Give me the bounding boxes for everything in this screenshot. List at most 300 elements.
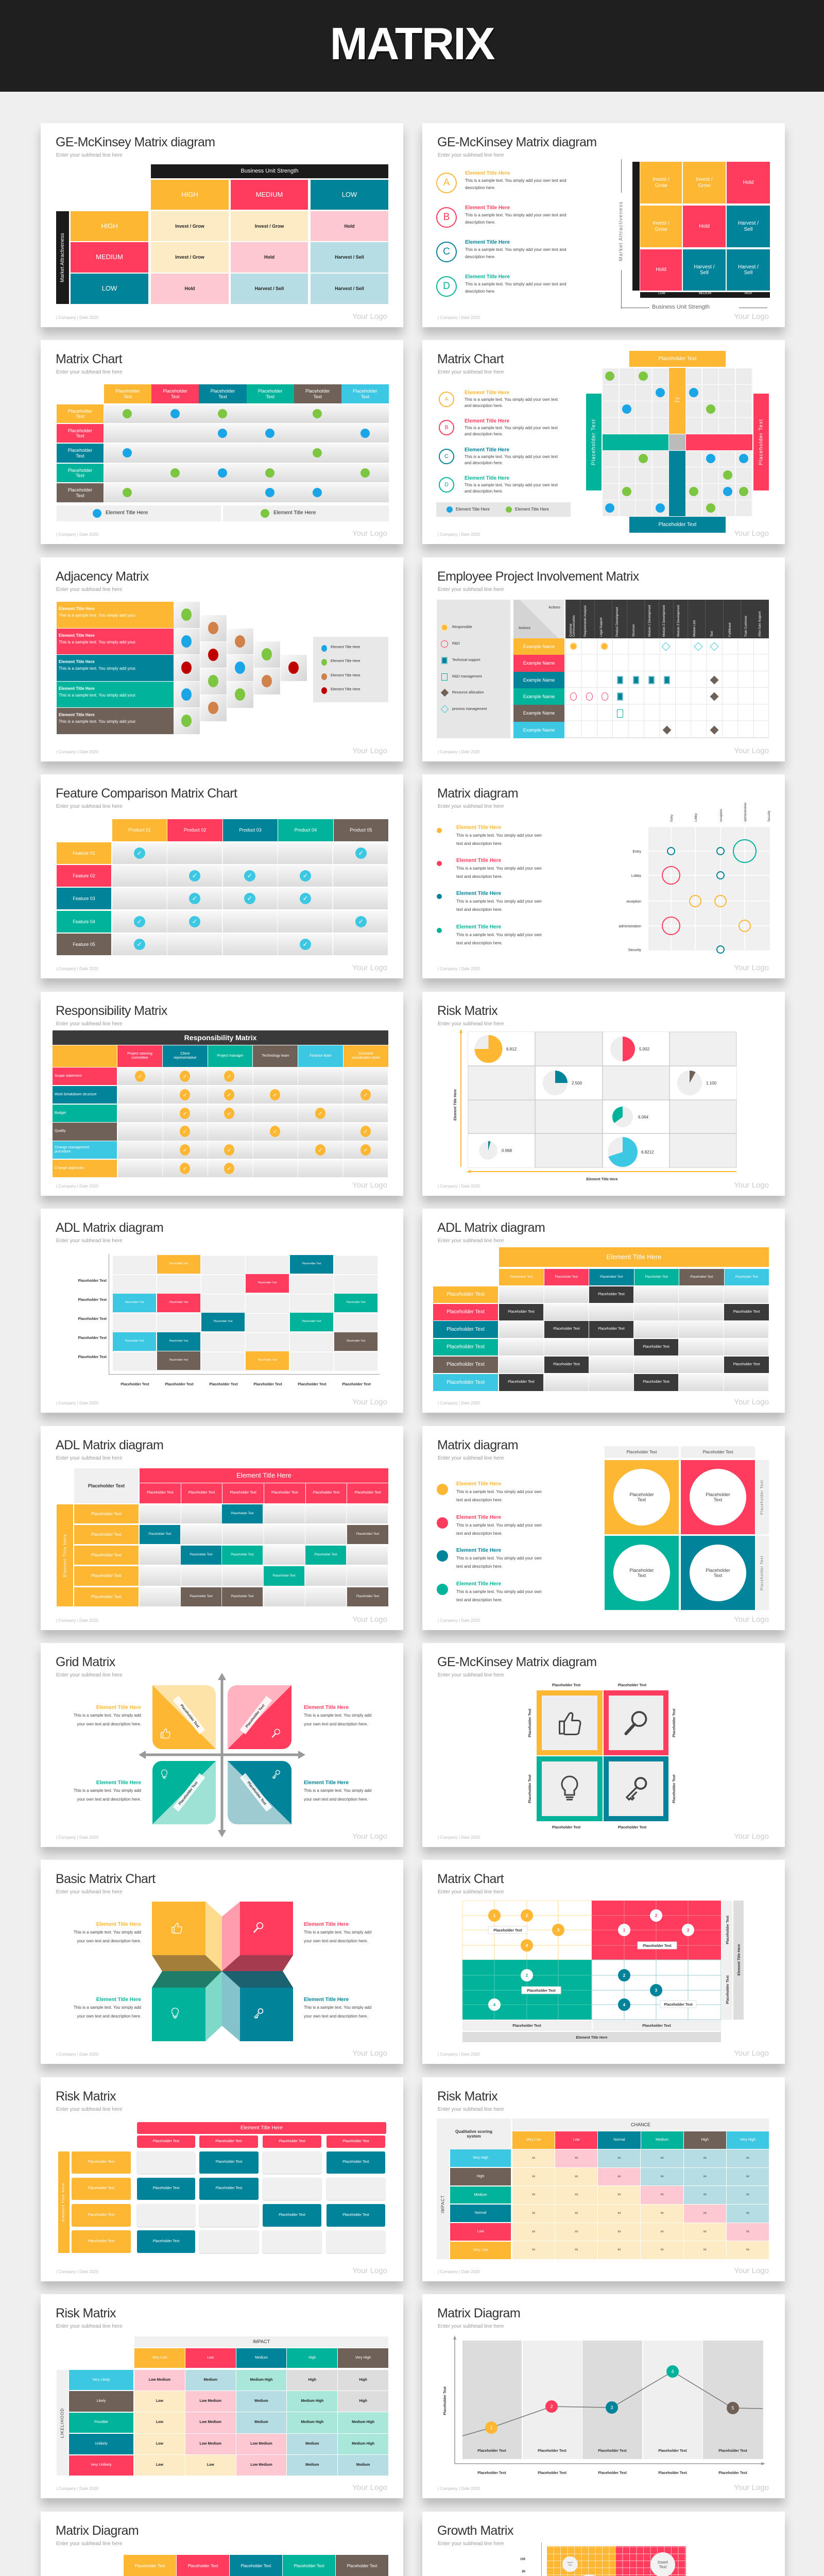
headers: Placeholder Text [294, 2564, 324, 2568]
slide 3: Matrix Chart dot table [41, 340, 403, 544]
slide 13: ADL Matrix diagram red header: Enter your subhead line here [56, 1455, 122, 1461]
cell grid: Placeholder Text [153, 2240, 179, 2243]
orange checks: ✓ [272, 1128, 278, 1134]
column headers: Placeholder [163, 388, 187, 394]
table: xx [661, 2175, 664, 2178]
legend panel [437, 600, 510, 738]
slide 1: GE-McKinsey matrix table: Hold [264, 255, 274, 260]
row labels and grid: Example Name [523, 727, 555, 733]
list: Element Title Here [456, 1581, 501, 1587]
table: xx [532, 2230, 535, 2233]
slide 10: Risk Matrix pies: Enter your subhead line here [438, 1021, 504, 1027]
table: Low [156, 2420, 163, 2424]
colored element bars: Element Title Here [59, 606, 95, 611]
list A-D: description here. [465, 255, 495, 259]
element list [437, 825, 542, 945]
pie grid chart: Element Title Here [454, 1089, 457, 1121]
table: xx [746, 2175, 749, 2178]
quadrant graphic with arrows: Placeholder Text [178, 1781, 199, 1806]
quadrant chart: Placeholder Text [527, 1989, 556, 1993]
row headers and rows: Text [76, 414, 84, 419]
product headers: Product 01 [128, 827, 151, 833]
slide 17: Basic Matrix Chart folded: This is a sample text. You simply add [74, 2005, 141, 2010]
table: xx [532, 2248, 535, 2251]
table: xx [532, 2212, 535, 2215]
check marks: ✓ [137, 849, 142, 857]
slide 17: Basic Matrix Chart folded: your own text and description here. [77, 2014, 141, 2019]
slide 17: Basic Matrix Chart folded: Enter your subhead line here [56, 1889, 122, 1895]
slide 19: Risk Matrix rounded cells: Placeholder Text [342, 2140, 369, 2143]
slide 13: ADL Matrix diagram red header: Placeholder Text [271, 1491, 298, 1495]
check marks: ✓ [192, 894, 197, 903]
slide 4: Matrix Chart cross layout: here [675, 400, 680, 403]
slide 14: Matrix diagram quadrant circles: Enter your subhead line here [438, 1455, 504, 1461]
quadrant matrix: Placeholder Text [760, 1480, 764, 1515]
table: LIKELIHOOD [60, 2408, 64, 2438]
slide 4: Matrix Chart cross layout: Placeholder Text [659, 356, 696, 362]
feature rows: Feature 02 [73, 873, 95, 878]
slide 15: Grid Matrix: This is a sample text. You simply add [304, 1788, 371, 1793]
bubble chart: Entry [671, 815, 674, 822]
quadrant chart: Element Title Here [576, 2036, 608, 2040]
task rows: Budget [55, 1111, 66, 1115]
cell grid: Placeholder Text [216, 2187, 242, 2190]
slide 7: Feature Comparison Matrix Chart: Feature Comparison Matrix Chart [56, 786, 237, 801]
colored element bars: This is a sample text. You simply add your. [59, 640, 136, 645]
line chart: 5 [731, 2405, 734, 2411]
legend: Element Title Here [106, 510, 148, 516]
A-D list [439, 390, 558, 494]
cell grid: Placeholder Text [88, 2240, 114, 2243]
slide 12: ADL Matrix diagram dark cells: Placeholder Text [510, 1276, 533, 1279]
slide 18: Matrix Chart numbered quadrants: Matrix Chart [437, 1872, 504, 1886]
cross grid [603, 368, 752, 516]
quadrant chart: 2 [623, 1973, 626, 1978]
slide 15: Grid Matrix: This is a sample text. You simply add [304, 1713, 371, 1718]
row headers and rows [57, 404, 389, 502]
slide 10: Risk Matrix pies: | Company | Date 2020 [438, 1184, 480, 1189]
rows: Placeholder Text [190, 1553, 213, 1556]
colored element bars: This is a sample text. You simply add your. [59, 613, 136, 618]
bubble chart: reception [720, 809, 723, 822]
red header [140, 1468, 388, 1483]
slide 3: Matrix Chart dot table: Enter your subhead line here [56, 369, 122, 375]
slide 6: Employee Project Involvement Matrix: Employee Project Involvement Matrix [437, 569, 639, 584]
slide 14: Matrix diagram quadrant circles: Matrix diagram [437, 1438, 518, 1452]
table: Very Low [152, 2356, 167, 2360]
involvement markers [570, 642, 719, 735]
line chart: Placeholder Text [598, 2449, 627, 2453]
check marks: ✓ [192, 918, 197, 925]
rows: Placeholder Text [598, 1327, 625, 1331]
rows: Placeholder Text [733, 1310, 760, 1314]
column headers: representative [174, 1056, 196, 1060]
icon quadrants: Placeholder Text [552, 1826, 580, 1829]
table title bar [53, 1030, 388, 1045]
diagonal header cell [513, 600, 564, 638]
rows: Placeholder Text [148, 1533, 171, 1536]
table: Low [573, 2138, 580, 2142]
slide 4: Matrix Chart cross layout: Enter your subhead line here [438, 369, 504, 375]
table: Very Likely [93, 2378, 110, 2382]
headers: Placeholder Text [347, 2564, 377, 2568]
table: Medium High [301, 2420, 323, 2424]
check marks: ✓ [137, 941, 142, 948]
slide 8: Matrix diagram bubble grid: | Company | Date 2020 [438, 967, 480, 971]
quadrant matrix: Placeholder [629, 1492, 654, 1497]
slide 12: ADL Matrix diagram dark cells: Placeholder Text [645, 1276, 668, 1279]
row headers and rows: Text [76, 493, 84, 498]
pie grid chart: 2.500 [572, 1081, 582, 1086]
list: This is a sample text. You simply add your own [456, 1489, 542, 1494]
row headers and rows: Placeholder [68, 428, 92, 433]
header: Element Title Here [241, 2125, 283, 2131]
slide 11: ADL Matrix diagram scatter grid: ADL Matrix diagram [56, 1221, 163, 1235]
slide 16: GE-McKinsey icon quadrants [422, 1643, 785, 1847]
legend box: Element Title Here [331, 646, 360, 649]
slide 2: GE-McKinsey with A-D list: | Company | Date 2020 [438, 315, 480, 320]
check marks [134, 848, 367, 950]
table: Medium [656, 2138, 668, 2142]
slide 1: GE-McKinsey matrix table [41, 123, 403, 327]
grid [113, 1255, 379, 1371]
table: Low Medium [200, 2442, 221, 2446]
growth grid chart: Text [568, 2564, 572, 2566]
list A-D: description here. [465, 185, 495, 190]
table: IMPACT [440, 2195, 445, 2213]
slide 9: Responsibility Matrix: | Company | Date 2020 [56, 1184, 98, 1189]
slide 17: Basic Matrix Chart folded [41, 1860, 403, 2064]
orange checks: ✓ [363, 1147, 368, 1153]
rows [74, 1504, 388, 1606]
colored element bars: Element Title Here [59, 633, 95, 638]
slide 6: Employee Project Involvement Matrix: Your Logo [734, 747, 769, 755]
rows: Placeholder Text [447, 1292, 485, 1297]
slide 2: GE-McKinsey with A-D list: Harvest / [738, 221, 759, 226]
slide 23: Matrix Diagram status icons: Matrix Diagram [56, 2523, 139, 2538]
table: xx [617, 2248, 621, 2251]
quadrant matrix [605, 1446, 769, 1610]
slide 19: Risk Matrix rounded cells [41, 2077, 403, 2281]
slide 1: GE-McKinsey matrix table: Harvest / Sell [335, 255, 364, 260]
column headers: Project steering [127, 1052, 152, 1056]
line chart: Placeholder Text [443, 2386, 447, 2415]
slide 2: GE-McKinsey with A-D list: MEDIUM [699, 292, 711, 295]
quadrant matrix: Placeholder [706, 1568, 730, 1573]
legend: Element Title Here [273, 510, 316, 516]
dots [123, 409, 370, 497]
table: xx [746, 2212, 749, 2215]
list A-D: description here. [465, 289, 495, 294]
element list: text and description here. [456, 874, 503, 879]
table: xx [575, 2157, 578, 2160]
dark column headers: After-Sale Support [759, 612, 762, 637]
quadrant matrix: Placeholder [706, 1492, 730, 1497]
text blocks [74, 1705, 141, 1726]
quadrant chart: 3 [655, 1988, 658, 1993]
slide 5: Adjacency Matrix: Adjacency Matrix [56, 569, 149, 584]
slide 17: Basic Matrix Chart folded: your own text and description here. [304, 2014, 368, 2019]
slide 2: GE-McKinsey with A-D list [422, 123, 785, 327]
slide 11: ADL Matrix diagram scatter grid: Placeholder Text [342, 1383, 371, 1386]
orange checks: ✓ [182, 1147, 187, 1153]
table: xx [661, 2230, 664, 2233]
A-D list: and description here. [465, 461, 503, 465]
slide 17: Basic Matrix Chart folded: This is a sample text. You simply add [304, 2005, 371, 2010]
legend panel: Technical support [452, 658, 480, 662]
line chart: Placeholder Text [718, 2471, 747, 2475]
slide 13: ADL Matrix diagram red header: | Company | Date 2020 [56, 1618, 98, 1623]
growth grid chart: Text [659, 2565, 666, 2569]
colored cells: Placeholder Text [302, 1262, 321, 1265]
slide 10: Risk Matrix pies: Your Logo [734, 1181, 769, 1190]
slide 4: Matrix Chart cross layout: Placeholder Text [591, 419, 596, 465]
list: This is a sample text. You simply add your own [456, 1556, 542, 1561]
slide 11: ADL Matrix diagram scatter grid: Placeholder Text [78, 1336, 107, 1340]
colored cells: Placeholder Text [169, 1262, 188, 1265]
dark column headers: Module 2 Development [663, 605, 666, 637]
vertical yellow bar: Element Title Here [62, 1534, 67, 1577]
slide 6: Employee Project Involvement Matrix: Enter your subhead line here [438, 587, 504, 592]
element list: text and description here. [456, 907, 503, 912]
row labels and grid: Example Name [523, 694, 555, 699]
table title bar: Responsibility Matrix [184, 1033, 256, 1042]
table [437, 2119, 769, 2259]
growth grid chart: 100 [520, 2558, 525, 2561]
list: text and description here. [456, 1531, 503, 1536]
growth grid chart: Insert [658, 2560, 668, 2565]
colored cells: Placeholder Text [125, 1301, 144, 1304]
table: Low Medium [149, 2378, 170, 2382]
slide 3: Matrix Chart dot table: Matrix Chart [56, 352, 122, 366]
table: xx [661, 2212, 664, 2215]
check marks: ✓ [358, 918, 364, 925]
table: Medium High [301, 2399, 323, 2403]
column headers: Text [218, 394, 227, 399]
slide 20: Risk Matrix chance vs impact: Enter your subhead line here [438, 2107, 504, 2112]
quadrant chart [462, 1900, 744, 2042]
list: Element Title Here [456, 1515, 501, 1520]
slide 11: ADL Matrix diagram scatter grid: Placeholder Text [165, 1383, 194, 1386]
slide 5: Adjacency Matrix [41, 557, 403, 761]
rows: Placeholder Text [553, 1327, 580, 1331]
A-D list: A [444, 396, 449, 402]
column headers: Text [266, 394, 274, 399]
slide 19: Risk Matrix rounded cells: Your Logo [352, 2266, 387, 2275]
line chart: Placeholder Text [658, 2471, 687, 2475]
slide 2: GE-McKinsey with A-D list: Harvest / [738, 264, 759, 270]
slide 15: Grid Matrix: your own text and description here. [304, 1722, 368, 1726]
quadrant chart: 2 [526, 1973, 528, 1978]
slide 10: Risk Matrix pies [422, 992, 785, 1196]
colored element bars [57, 602, 174, 734]
table: xx [575, 2212, 578, 2215]
matrix grid [632, 162, 640, 291]
slide 12: ADL Matrix diagram dark cells [422, 1209, 785, 1413]
quadrant chart: 3 [557, 1928, 560, 1933]
list A-D: B [443, 212, 450, 223]
table: Very Unlikely [91, 2463, 112, 2467]
element list: text and description here. [456, 841, 503, 846]
column headers: Text [171, 394, 179, 399]
colored cells: Placeholder Text [169, 1340, 188, 1343]
cell grid: Placeholder Text [216, 2160, 242, 2164]
row labels and grid: Example Name [523, 710, 555, 716]
slide 16: GE-McKinsey icon quadrants: | Company | Date 2020 [438, 1835, 480, 1840]
table: xx [532, 2157, 535, 2160]
table: xx [661, 2193, 664, 2196]
slide 12: ADL Matrix diagram dark cells: ADL Matrix diagram [437, 1221, 545, 1235]
product headers: Product 02 [184, 827, 206, 833]
list A-D: Element Title Here [465, 205, 510, 211]
slide 2: GE-McKinsey with A-D list: GE-McKinsey Matrix diagram [437, 135, 596, 149]
slide 2: GE-McKinsey with A-D list: HIGH [745, 292, 752, 295]
colored element bars: Element Title Here [59, 713, 95, 717]
table: Normal [613, 2138, 625, 2142]
cell grid: Placeholder Text [342, 2213, 369, 2217]
row headers and rows: Placeholder [68, 448, 92, 453]
orange checks: ✓ [227, 1165, 232, 1172]
slide 21: Risk Matrix likelihood vs impact: | Company | Date 2020 [56, 2486, 98, 2491]
table: Unlikely [95, 2442, 108, 2446]
slide 20: Risk Matrix chance vs impact [422, 2077, 785, 2281]
slide 19: Risk Matrix rounded cells: Placeholder Text [153, 2140, 179, 2143]
slide 20: Risk Matrix chance vs impact: Your Logo [734, 2266, 769, 2275]
slide 15: Grid Matrix: Enter your subhead line here [56, 1672, 122, 1678]
rows: Placeholder Text [356, 1595, 379, 1598]
header: Element Title Here [607, 1253, 661, 1261]
slide 22: Matrix Diagram line chart: Matrix Diagram [437, 2306, 520, 2320]
slide 2: GE-McKinsey with A-D list: Grow [698, 182, 710, 189]
slide 12: ADL Matrix diagram dark cells: Placeholder Text [555, 1276, 578, 1279]
orange checks: ✓ [363, 1091, 368, 1098]
orange checks: ✓ [227, 1110, 232, 1117]
slide 18: Matrix Chart numbered quadrants: Your Logo [734, 2049, 769, 2058]
rows: Placeholder Text [447, 1380, 485, 1385]
dark column headers: Product Development [616, 607, 619, 637]
quadrant chart: Element Title Here [737, 1944, 741, 1975]
slide 15: Grid Matrix: your own text and description here. [304, 1797, 368, 1802]
rows: Placeholder Text [314, 1553, 337, 1556]
dark column headers: Legal Support [600, 618, 603, 637]
corner label [74, 1468, 139, 1503]
slide 1: GE-McKinsey matrix table: Hold [344, 224, 354, 229]
line chart: Placeholder Text [538, 2471, 566, 2475]
slide 1: GE-McKinsey matrix table: Enter your subhead line here [56, 152, 122, 158]
rows: Placeholder Text [231, 1553, 254, 1556]
A-D list: This is a sample text. You simply add your own text [465, 397, 558, 402]
slide 1: GE-McKinsey matrix table: MEDIUM [96, 253, 123, 261]
slide 16: GE-McKinsey icon quadrants: GE-McKinsey Matrix diagram [437, 1655, 596, 1669]
A-D list: This is a sample text. You simply add your own text [465, 454, 558, 459]
slide 13: ADL Matrix diagram red header: Placeholder Text [147, 1491, 174, 1495]
check marks: ✓ [303, 894, 308, 903]
axes [621, 159, 622, 309]
table: Medium High [352, 2442, 374, 2446]
slide 9: Responsibility Matrix: Responsibility Matrix [56, 1004, 167, 1018]
growth grid chart: 90 [522, 2570, 525, 2573]
check marks: ✓ [358, 849, 364, 857]
quadrant matrix: Text [638, 1573, 646, 1578]
bubble chart: Lobby [631, 874, 641, 878]
column headers [53, 1045, 388, 1067]
slide 16: GE-McKinsey icon quadrants: Your Logo [734, 1832, 769, 1841]
legend panel: Resource allocation [452, 691, 484, 694]
slide 21: Risk Matrix likelihood vs impact [41, 2294, 403, 2498]
quadrant matrix: Text [714, 1573, 722, 1578]
A-D list: Element Title Here [465, 390, 509, 396]
table: Very High [740, 2138, 756, 2142]
slide 7: Feature Comparison Matrix Chart: Your Logo [352, 963, 387, 972]
slide 1: GE-McKinsey matrix table: Hold [184, 286, 195, 291]
rows: Placeholder Text [508, 1310, 535, 1314]
column header bar: Business Unit Strength [241, 168, 298, 174]
table: xx [661, 2248, 664, 2251]
slide 17: Basic Matrix Chart folded: Element Title Here [304, 1922, 349, 1927]
slide 4: Matrix Chart cross layout: Matrix Chart [437, 352, 504, 366]
table: Medium [254, 2420, 268, 2424]
orange checks [135, 1071, 371, 1174]
pie grid chart: 0.968 [502, 1148, 512, 1153]
table: xx [617, 2230, 621, 2233]
row labels and grid: Example Name [523, 660, 555, 666]
table: High [359, 2399, 367, 2403]
quadrant chart: 1 [623, 1928, 626, 1933]
table [57, 2336, 388, 2476]
colored cells: Placeholder Text [302, 1320, 321, 1323]
slide 14: Matrix diagram quadrant circles [422, 1426, 785, 1630]
feature rows: Feature 03 [73, 896, 95, 901]
header: MATRIX title: MATRIX [330, 18, 494, 69]
icon quadrants [528, 1684, 676, 1829]
legend panel: R&D management [452, 675, 482, 679]
dark column headers: Requirements Analysis [584, 605, 587, 637]
element list: Element Title Here [456, 825, 501, 831]
table: IMPACT [253, 2339, 270, 2344]
list: This is a sample text. You simply add your own [456, 1523, 542, 1528]
slide 15: Grid Matrix: your own text and description here. [77, 1797, 141, 1802]
line chart: 2 [550, 2404, 553, 2409]
list A-D: Element Title Here [465, 274, 510, 280]
diagonal header cell: Actions [548, 606, 560, 609]
quadrant chart: 1 [493, 1913, 496, 1918]
slide 1: GE-McKinsey matrix table: Invest / Grow [175, 224, 204, 229]
table: Medium [474, 2193, 487, 2197]
product headers: Product 04 [295, 827, 317, 833]
element list: Element Title Here [456, 891, 501, 896]
column headers: Project manager [217, 1054, 244, 1058]
slide 7: Feature Comparison Matrix Chart: Enter your subhead line here [56, 804, 122, 809]
orange checks: ✓ [227, 1091, 232, 1098]
slide 21: Risk Matrix likelihood vs impact: Your Logo [352, 2483, 387, 2492]
slide 23: Matrix Diagram status icons: Enter your subhead line here [56, 2541, 122, 2547]
table: xx [575, 2230, 578, 2233]
slide 21: Risk Matrix likelihood vs impact: Enter your subhead line here [56, 2324, 122, 2329]
table: xx [575, 2248, 578, 2251]
table: Medium [356, 2463, 370, 2467]
dark column headers: Customer Communication [570, 615, 576, 637]
slide 1: GE-McKinsey matrix table: GE-McKinsey Matrix diagram [56, 135, 215, 149]
slide 2: GE-McKinsey with A-D list: Grow [655, 182, 667, 189]
bubble chart: Lobby [695, 814, 698, 822]
cell grid: Placeholder Text [88, 2213, 114, 2217]
icon quadrants: Placeholder Text [618, 1826, 646, 1829]
list A-D: A [443, 177, 450, 188]
slide 13: ADL Matrix diagram red header: Placeholder Text [313, 1491, 339, 1495]
quadrant chart: Placeholder Text [643, 1944, 672, 1948]
line chart: Placeholder Text [538, 2449, 566, 2453]
text blocks: your own text and description here. [77, 1939, 141, 1943]
